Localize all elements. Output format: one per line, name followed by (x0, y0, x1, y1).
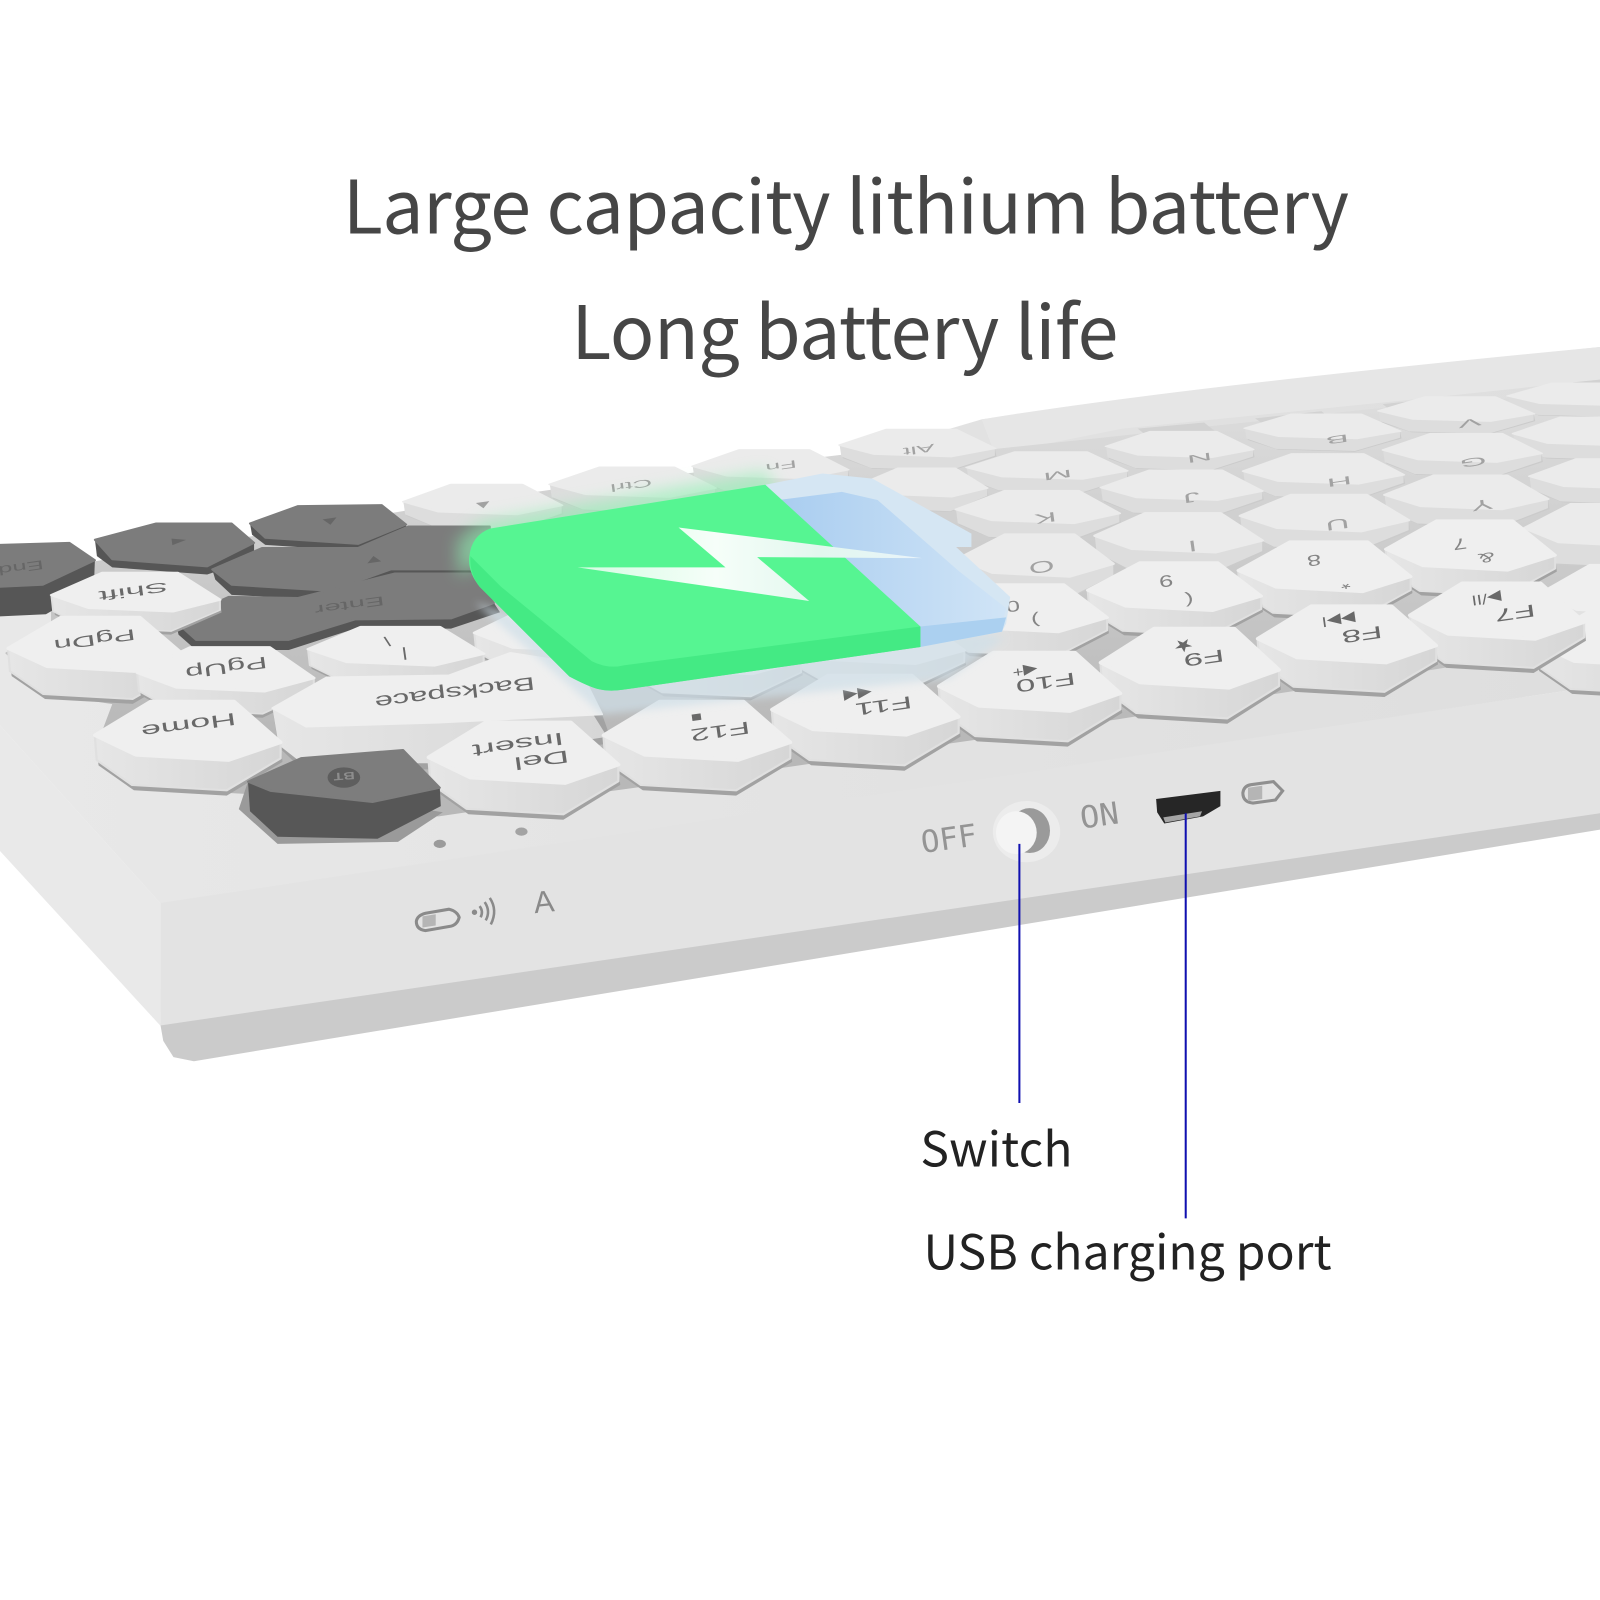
key legends: dark cluster: ▼ (361, 552, 387, 568)
keyboard product photo (0, 347, 1600, 1061)
ridge key shadows (1138, 380, 1600, 437)
key legends: dark cluster: ◄ (167, 534, 192, 549)
key legends: dark cluster: Enter (313, 593, 385, 618)
keys: function row (429, 583, 1600, 820)
key legends: number row: 9 (1158, 571, 1174, 591)
key legends: back rows: H (1326, 473, 1353, 490)
keys: left light cluster (8, 573, 612, 796)
green glow (457, 471, 786, 577)
key legends: left light cluster: Home (140, 709, 237, 742)
key legends: back rows: ▲ (471, 498, 495, 513)
key: BT dark key: BT (332, 769, 355, 783)
key legends: left light cluster: | (401, 646, 409, 662)
key well shading (5, 393, 1600, 816)
USB port (1156, 791, 1220, 823)
battery graphic (457, 471, 1010, 714)
keys: back rows (404, 383, 1600, 599)
power switch (993, 801, 1060, 862)
key legends: number row: & (1476, 549, 1496, 566)
key legends: function row: ★ (1172, 634, 1195, 656)
key legends: number row: 7 (1452, 534, 1468, 553)
backspace key (272, 653, 612, 769)
blue bottom band (920, 617, 1006, 647)
keys: dark navigation cluster (0, 505, 500, 650)
key legends: back rows: J (1182, 489, 1201, 506)
key legends: left light cluster: Shift (97, 579, 169, 604)
key legends: back rows: Ctrl (609, 476, 653, 494)
dark key: End (0, 543, 95, 616)
key legends: back rows: K (1033, 509, 1057, 527)
key legends: number row: ( (1184, 591, 1195, 609)
raised back ridge (982, 347, 1600, 454)
dark key: left arrow (95, 523, 254, 574)
key legends: function row: F9 (1182, 645, 1225, 671)
key legends: function row: F10 (1015, 669, 1077, 696)
key legends: dark cluster: ▲ (318, 514, 343, 530)
blue halo section (765, 473, 1010, 647)
keyboard bottom strip (160, 812, 1600, 1061)
indicator lights (434, 828, 528, 848)
key legends: function row (471, 588, 1537, 773)
key legends: back rows: M (1042, 467, 1073, 482)
key: BT dark key (239, 750, 443, 844)
key legends: function row: F12 (689, 718, 751, 745)
key legends: function row: Del (513, 746, 570, 773)
key legends: back rows: N (1186, 450, 1213, 465)
callout: switch: Switch (920, 1110, 1072, 1180)
label: ON: ON (1078, 796, 1121, 836)
icon: charging battery (1243, 782, 1283, 803)
dark key: up arrow (250, 505, 406, 551)
key legends: back rows: U (1324, 514, 1350, 533)
callout: USB charging port: USB charging port (923, 1213, 1332, 1283)
title: Long battery life (571, 275, 1118, 381)
green charge level (469, 485, 920, 691)
key legends: left light cluster (53, 579, 536, 742)
key legends: back rows: G (1459, 454, 1487, 471)
label: A: A (532, 884, 556, 920)
battery lower rim (470, 556, 920, 691)
key legends: back rows: Alt (902, 441, 935, 457)
key legends: back rows: B (1325, 432, 1350, 446)
keyboard front face (160, 686, 1600, 1026)
key legends: left light cluster: \ (382, 633, 392, 649)
lower halo over keys (474, 602, 1005, 714)
key legends: back rows: O (1028, 556, 1056, 578)
key legends: function row: F8 (1341, 622, 1384, 647)
dark key: down arrow wide (212, 527, 490, 600)
key legends: left light cluster: Backspace (374, 673, 536, 713)
key legends: back rows: I (1187, 537, 1198, 555)
key legends: number row: 8 (1306, 550, 1322, 569)
icon: wireless signal (473, 898, 494, 924)
key legends: function row: ■ (690, 709, 703, 725)
key legends: back rows (471, 415, 1494, 578)
title (343, 150, 1349, 381)
key legends: dark cluster (0, 514, 387, 618)
blue fading section (779, 492, 1006, 627)
key legends: function row: F11 (854, 692, 913, 720)
title: Large capacity lithium battery (343, 150, 1349, 256)
lightning bolt (578, 528, 922, 601)
key legends: function row: Insert (471, 728, 565, 760)
keyboard top plate (0, 347, 1600, 903)
key legends: function row: ▶/II (1471, 588, 1502, 609)
icon: battery on front face (416, 909, 459, 931)
key legends: number row: ) (1030, 611, 1041, 629)
key legends: function row: ◀+ (1012, 661, 1039, 681)
key legends: left light cluster: PgUp (184, 653, 268, 683)
key legends: number row: 0 (1005, 596, 1021, 615)
key legends: back rows: Y (1470, 495, 1494, 514)
key legends: number row (1005, 534, 1496, 629)
key legends: back rows: Fn (765, 457, 798, 474)
dark key: Enter (176, 573, 500, 650)
key legends: left light cluster: PgDn (53, 625, 137, 654)
key legends: back rows: V (1456, 415, 1482, 430)
key legends: function row: ▶▶I (1321, 610, 1356, 630)
label: OFF: OFF (919, 819, 979, 861)
key legends: function row: ◀◀ (841, 684, 873, 705)
keyboard left side (0, 726, 160, 1026)
keys: number row (474, 521, 1600, 700)
key legends: number row: * (1339, 576, 1351, 592)
key legends: function row: F7 (1494, 601, 1537, 626)
